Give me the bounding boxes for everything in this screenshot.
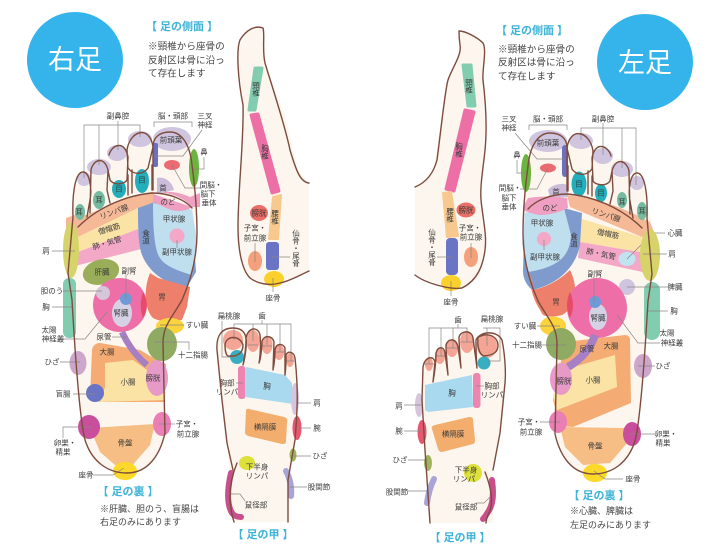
zone: 首: 首 xyxy=(159,182,167,192)
zone: 下半身リンパ: 下半身 xyxy=(455,464,478,474)
zone: 耳: 耳 xyxy=(75,208,83,216)
bone: 仙骨・尾骨 xyxy=(266,228,300,270)
zone: 甲状腺 xyxy=(153,203,197,275)
zone: 歯: 歯 xyxy=(454,314,462,324)
zone: 副鼻腔 xyxy=(77,110,152,186)
zone: 腕: 腕 xyxy=(395,426,403,436)
zone: 副甲状腺 xyxy=(162,228,192,256)
zone: 食道 xyxy=(523,208,582,290)
zone: 膀胱 xyxy=(456,202,476,218)
zone: 鼠径部: 鼠径部 xyxy=(455,502,478,512)
zone: 太陽神経叢: 神経叢 xyxy=(42,334,65,344)
zone: 僧帽筋 xyxy=(580,219,642,252)
heading: 足の裏 (right): 【 足の裏 】 xyxy=(97,484,159,498)
zone: 股関節 xyxy=(286,471,331,496)
bone: 胸椎: 胸椎 xyxy=(260,143,270,161)
bone: 腰椎: 腰椎 xyxy=(270,209,280,226)
panel: right foot top view xyxy=(216,310,331,522)
zone: 太陽神経叢: 太陽 xyxy=(42,324,57,334)
zone: 脳・頭部: 脳・頭部 xyxy=(533,114,563,124)
zone: 胸部リンパ: 胸部 xyxy=(220,378,235,388)
panel: right foot sole xyxy=(41,110,222,480)
zone: 鼻 xyxy=(513,150,531,192)
zone: 鼠径部 xyxy=(228,473,268,517)
zone: 腕: 腕 xyxy=(313,424,321,432)
bone: 仙骨・尾骨: 仙骨・尾骨 xyxy=(427,227,436,266)
zone: リンパ腺 xyxy=(66,192,158,237)
zone: 歯 xyxy=(424,314,474,371)
zone: 前頭葉 xyxy=(153,127,191,151)
zone: のど: のど xyxy=(542,204,558,212)
zone: 間脳・脳下垂体 xyxy=(499,164,556,212)
zone: 十二指腸 xyxy=(147,327,208,361)
zone: 肩: 肩 xyxy=(313,398,321,408)
bone: 腰椎 xyxy=(443,192,458,237)
bone: 頸椎 xyxy=(463,65,475,106)
zone: 胸: 胸 xyxy=(263,380,271,390)
zone: 子宮・前立腺 xyxy=(518,411,567,436)
zone: 子宮・前立腺 xyxy=(244,222,267,271)
zone: 卵巣・精巣 xyxy=(54,415,100,456)
zone: 座骨: 座骨 xyxy=(78,470,94,480)
zone: 肩: 肩 xyxy=(395,402,403,410)
zone: 副甲状腺 xyxy=(530,232,560,262)
bone: 仙骨・尾骨: 仙骨・尾骨 xyxy=(291,228,300,267)
zone: すい臓 xyxy=(156,318,209,334)
zone: 卵巣・精巣: 卵巣・ xyxy=(655,428,677,438)
zone: 目: 目 xyxy=(575,180,583,188)
zone: リンパ腺: リンパ腺 xyxy=(590,205,622,224)
zone: 耳 xyxy=(75,191,105,220)
foot base xyxy=(238,28,309,285)
zone: 前頭葉: 前頭葉 xyxy=(537,138,560,148)
zone: 股関節 xyxy=(386,479,434,503)
zone: 卵巣・精巣: 精巣 xyxy=(656,438,671,448)
zone: 食道: 食道 xyxy=(569,232,578,249)
zone: 股関節: 股関節 xyxy=(386,486,409,496)
zone: 子宮・前立腺: 前立腺 xyxy=(520,426,543,436)
zone: 食道: 食道 xyxy=(141,229,150,246)
bone: 腰椎 xyxy=(269,195,281,239)
zone: 目 xyxy=(572,172,607,202)
foot outline xyxy=(217,328,297,522)
bone: 頸椎: 頸椎 xyxy=(464,78,474,95)
zone: 副鼻腔 xyxy=(569,114,644,190)
zone: 肩 xyxy=(291,383,321,415)
zone: 副腎: 副腎 xyxy=(588,268,603,278)
foot base xyxy=(66,133,197,473)
zone: 胸部リンパ: リンパ xyxy=(216,388,239,396)
zone: 横隔膜 xyxy=(432,417,475,452)
zone: 胸 xyxy=(246,367,293,404)
zone: 座骨 xyxy=(583,464,640,484)
zone: 太陽神経叢 xyxy=(42,312,107,344)
zone: 僧帽筋 xyxy=(78,208,138,252)
zone: 脾臓 xyxy=(619,279,683,295)
zone: すい臓: すい臓 xyxy=(186,320,209,330)
bone: 頸椎 xyxy=(249,68,262,110)
zone: 座骨 xyxy=(264,271,284,302)
zone: 三叉神経: 三叉 xyxy=(502,114,517,124)
zone: 副甲状腺: 副甲状腺 xyxy=(530,252,560,262)
zone: 腎臓 xyxy=(589,304,607,330)
zone: 膀胱 xyxy=(250,205,268,221)
zone: 扁桃腺 xyxy=(218,310,244,364)
zone: 目: 目 xyxy=(115,184,123,194)
panel: left foot sole xyxy=(499,114,684,484)
zone: 間脳・脳下垂体: 脳下 xyxy=(502,192,517,202)
zone: 腎臓 xyxy=(112,299,132,327)
zone: 腕 xyxy=(292,416,321,440)
zone: 甲状腺: 甲状腺 xyxy=(531,218,554,228)
bone: 仙骨・尾骨 xyxy=(427,227,458,275)
heading: 足の甲 (left): 【 足の甲 】 xyxy=(429,531,491,544)
zone: 扁桃腺: 扁桃腺 xyxy=(218,310,241,320)
zone: 卵巣・精巣 xyxy=(623,422,677,448)
zone: 鼻 xyxy=(189,146,208,187)
zone: 股関節: 股関節 xyxy=(308,482,331,492)
zone: 首 xyxy=(548,184,568,197)
zone: ひざ xyxy=(44,351,86,375)
zone: 膀胱: 膀胱 xyxy=(146,372,161,382)
foot base xyxy=(523,134,654,474)
note: sole (right) xyxy=(100,504,199,527)
zone: 大腸: 大腸 xyxy=(100,346,115,356)
badge: 右足: 右足 xyxy=(48,45,102,75)
zone: 横隔膜 xyxy=(245,409,287,444)
zone: 座骨 xyxy=(441,275,461,306)
zone: 副鼻腔: 副鼻腔 xyxy=(592,114,615,124)
zone: 胆のう: 胆のう xyxy=(41,286,63,296)
zone: 尿管 xyxy=(96,332,147,365)
zone: 腎臓: 腎臓 xyxy=(114,308,129,318)
zone: 目 xyxy=(112,169,149,198)
foot outline xyxy=(238,27,309,284)
zone: 骨盤: 骨盤 xyxy=(118,438,133,448)
zone: 三叉神経: 神経 xyxy=(198,120,213,130)
zone: すい臓 xyxy=(514,316,566,336)
zone: 扁桃腺 xyxy=(477,314,504,370)
zone: 子宮・前立腺: 前立腺 xyxy=(460,232,483,242)
badge: 左足 xyxy=(597,14,693,110)
note: side view (left): て存在します xyxy=(498,70,556,82)
foot outline xyxy=(422,332,505,523)
foot base xyxy=(415,31,485,288)
note: sole (left): ※心臓、脾臓は xyxy=(570,505,633,516)
zone: 肺・気管 xyxy=(75,229,141,266)
zone: 胸 xyxy=(42,278,76,338)
zone: 膀胱: 膀胱 xyxy=(458,204,474,214)
zone: 鼻: 鼻 xyxy=(513,150,521,160)
zone: 間脳・脳下垂体: 間脳・ xyxy=(499,182,521,192)
zone: 腕 xyxy=(395,420,426,444)
zone: 腎 pink circle xyxy=(93,278,147,332)
zone: 小腸 xyxy=(553,355,617,410)
bone: 胸椎 xyxy=(446,110,474,191)
zone: 太陽神経叢: 太陽 xyxy=(660,328,675,338)
zone: 胸部リンパ xyxy=(473,373,504,408)
zone: 膀胱 xyxy=(550,363,572,395)
zone: のど xyxy=(523,196,568,215)
zone: 肺・気管: 肺・気管 xyxy=(585,246,617,262)
zone: 脾臓: 脾臓 xyxy=(668,282,683,292)
zone: 脳・頭部: 脳・頭部 xyxy=(158,110,188,120)
zone: 尿管: 尿管 xyxy=(580,344,595,354)
zone: 盲腸: 盲腸 xyxy=(56,388,71,398)
zone: 胆のう xyxy=(41,286,110,300)
zone: 胸 xyxy=(644,282,678,340)
zone: 大腸: 大腸 xyxy=(604,340,619,350)
zone: 胃 xyxy=(146,273,190,321)
zone: 肺・気管 xyxy=(578,242,647,273)
zone: 横隔膜: 横隔膜 xyxy=(442,428,465,438)
foot base xyxy=(422,334,505,523)
zone: 副腎 xyxy=(588,268,603,308)
zone: 心臓: 心臓 xyxy=(668,228,683,238)
zone: 卵巣・精巣: 卵巣・ xyxy=(54,438,76,448)
note: side view (right): ※頸椎から座骨の xyxy=(148,40,225,52)
zone: 肝臓 xyxy=(80,255,122,289)
zone: 胸: 胸 xyxy=(670,306,678,316)
zone: 僧帽筋: 僧帽筋 xyxy=(97,220,122,237)
zone: 下半身リンパ: リンパ xyxy=(453,474,476,484)
zone: 十二指腸 xyxy=(512,328,576,360)
note: sole (left) xyxy=(570,505,651,530)
zone: 子宮・前立腺 xyxy=(459,222,483,267)
zone: 甲状腺 xyxy=(524,208,571,272)
zone: 副甲状腺: 副甲状腺 xyxy=(162,246,192,256)
zone: 間脳・脳下垂体: 垂体 xyxy=(202,198,217,208)
heading: 足の裏 (left): 【 足の裏 】 xyxy=(568,488,630,502)
foot base xyxy=(217,328,297,522)
zone: 腎 pink circle xyxy=(567,278,627,338)
zone: 首 xyxy=(157,178,174,194)
zone: 大腸 xyxy=(90,343,166,402)
bone: 胸椎 xyxy=(251,114,279,193)
zone: 肩: 肩 xyxy=(668,250,676,258)
zone: 首: 首 xyxy=(552,186,560,196)
zone: 膀胱: 膀胱 xyxy=(252,208,267,218)
heading: 足の側面 (left): 【 足の側面 】 xyxy=(496,24,568,37)
zone: 子宮・前立腺 xyxy=(153,412,200,438)
zone: 横隔膜: 横隔膜 xyxy=(254,422,277,432)
zone: 胃: 胃 xyxy=(158,292,166,302)
zone: 胃: 胃 xyxy=(552,298,560,306)
zone: 胃 xyxy=(530,270,575,316)
bone: 腰椎: 腰椎 xyxy=(445,207,454,224)
zone: すい臓: すい臓 xyxy=(514,320,537,330)
zone: 鼠径部 xyxy=(455,480,493,519)
zone: 卵巣・精巣: 精巣 xyxy=(56,446,71,456)
zone: 胸部リンパ: リンパ xyxy=(481,390,504,400)
zone: 三叉神経: 三叉 xyxy=(198,112,213,120)
zone: 副鼻腔: 副鼻腔 xyxy=(107,110,130,120)
note: side view (right): て存在します xyxy=(148,68,206,80)
zone: 甲状腺: 甲状腺 xyxy=(163,214,186,224)
zone: 三叉神経 xyxy=(153,112,213,167)
zone: 子宮・前立腺: 前立腺 xyxy=(244,232,267,242)
zone: リンパ腺: リンパ腺 xyxy=(98,202,130,221)
foot outline xyxy=(68,132,197,473)
zone: ひざ: ひざ xyxy=(44,356,60,366)
zone: のど: のど xyxy=(160,198,176,206)
badge: 右足 xyxy=(27,12,123,108)
zone: 耳: 耳 xyxy=(638,206,646,216)
zone: ひざ: ひざ xyxy=(656,360,671,370)
zone: 膀胱 xyxy=(146,360,168,396)
note: side view (right): 反射区は骨に沿っ xyxy=(148,54,225,66)
note: side view (left): ※頸椎から座骨の xyxy=(498,44,575,56)
zone: 座骨 xyxy=(78,462,137,480)
zone: 胸 xyxy=(425,375,473,412)
zone: 心臓 xyxy=(618,228,683,266)
zone: 前頭葉 xyxy=(529,130,567,152)
heading: 足の甲 (right): 【 足の甲 】 xyxy=(232,528,294,541)
zone: 腎臓: 腎臓 xyxy=(590,312,606,322)
zone: 肩 xyxy=(395,393,423,417)
zone: ひざ xyxy=(392,454,432,471)
zone: 歯 xyxy=(223,310,294,367)
heading: 足の側面 (right): 【 足の側面 】 xyxy=(146,20,218,33)
zone: 子宮・前立腺: 子宮・ xyxy=(459,222,481,232)
zone: 子宮・前立腺: 子宮・ xyxy=(244,222,266,232)
zone: 三叉神経: 神経 xyxy=(502,122,517,132)
zone: 子宮・前立腺: 子宮・ xyxy=(518,416,540,426)
zone: 脳・頭部 xyxy=(154,110,192,127)
zone: ひざ: ひざ xyxy=(312,450,328,460)
zone: 目: 目 xyxy=(597,188,605,198)
zone: 前頭葉: 前頭葉 xyxy=(160,134,183,144)
zone: 太陽神経叢: 神経叢 xyxy=(661,338,684,348)
panel: left foot side view xyxy=(415,31,486,306)
zone: 子宮・前立腺: 子宮・ xyxy=(176,418,198,428)
zone: 歯: 歯 xyxy=(258,310,266,320)
zone: 胸部リンパ: 胸部 xyxy=(484,380,500,390)
zone: 肝臓: 肝臓 xyxy=(94,266,110,276)
foot outline xyxy=(523,133,652,474)
zone: 大腸 xyxy=(553,335,631,427)
zone: 胸: 胸 xyxy=(42,302,50,312)
zone: 間脳・脳下垂体: 垂体 xyxy=(502,202,517,212)
panel: right foot side view xyxy=(238,27,309,303)
zone: 下半身リンパ xyxy=(453,464,482,484)
zone: 座骨: 座骨 xyxy=(626,474,640,484)
zone: 子宮・前立腺: 前立腺 xyxy=(177,428,200,438)
zone: 十二指腸: 十二指腸 xyxy=(512,340,542,350)
note: sole (left): 左足のみにあります xyxy=(570,519,651,530)
zone: 下半身リンパ: 下半身 xyxy=(246,462,269,472)
foot outline xyxy=(415,31,486,288)
zone: リンパ腺 xyxy=(567,195,655,237)
note: side view (right) xyxy=(148,40,225,80)
zone: 座骨: 座骨 xyxy=(444,298,458,306)
panel: left foot top view xyxy=(386,314,505,523)
zone: 三叉神経 xyxy=(502,114,568,177)
zone: 耳: 耳 xyxy=(618,198,626,206)
zone: 肩 xyxy=(42,222,79,278)
badge: 左足: 左足 xyxy=(618,48,672,78)
note: sole (right): ※肝臓、胆のう、盲腸は xyxy=(100,504,199,514)
note: side view (left): 反射区は骨に沿っ xyxy=(498,56,575,68)
zone: 副腎 xyxy=(120,266,137,305)
zone: 胸部リンパ xyxy=(216,366,246,399)
zone: 間脳・脳下垂体 xyxy=(164,160,222,208)
zone: のど xyxy=(153,192,200,211)
zone: 耳 xyxy=(617,192,647,220)
zone: ひざ xyxy=(290,448,328,462)
zone: 小腸: 小腸 xyxy=(586,376,601,384)
zone: 鼻: 鼻 xyxy=(200,146,208,156)
zone: 盲腸 xyxy=(56,384,104,402)
zone: 間脳・脳下垂体: 間脳・ xyxy=(200,180,222,190)
zone: 下半身リンパ: リンパ xyxy=(246,472,269,480)
zone: 胸: 胸 xyxy=(448,388,456,398)
zone: 肺・気管: 肺・気管 xyxy=(91,233,123,252)
zone: 骨盤 xyxy=(560,427,627,465)
zone: 太陽神経叢 xyxy=(617,315,684,348)
zone: 肩 xyxy=(640,229,676,281)
zone: 十二指腸: 十二指腸 xyxy=(178,350,208,360)
note: sole (right): 右足のみにあります xyxy=(100,516,181,527)
zone: 尿管 xyxy=(568,335,595,367)
zone: 目: 目 xyxy=(138,176,146,184)
zone: 小腸: 小腸 xyxy=(120,378,136,386)
zone: 僧帽筋: 僧帽筋 xyxy=(596,226,621,241)
zone: 間脳・脳下垂体: 脳下 xyxy=(200,188,216,198)
zone: 食道 xyxy=(138,202,196,287)
zone: 尿管: 尿管 xyxy=(96,332,112,342)
zone: ひざ: ひざ xyxy=(392,454,408,464)
zone: 肩: 肩 xyxy=(42,246,50,256)
zone: ひざ xyxy=(634,354,671,378)
zone: 骨盤: 骨盤 xyxy=(588,440,603,450)
zone: 耳: 耳 xyxy=(95,196,103,204)
note: side view (left) xyxy=(498,44,575,82)
bone: 頸椎: 頸椎 xyxy=(251,81,260,98)
zone: 膀胱: 膀胱 xyxy=(556,376,572,386)
zone: 下半身リンパ xyxy=(239,456,269,480)
zone: 小腸 xyxy=(100,360,165,402)
zone: 副腎: 副腎 xyxy=(122,266,137,276)
zone: 鼠径部: 鼠径部 xyxy=(245,500,268,510)
bone: 胸椎: 胸椎 xyxy=(454,141,464,159)
zone: 脳・頭部 xyxy=(529,114,567,130)
zone: 骨盤 xyxy=(90,424,155,468)
zone: 座骨: 座骨 xyxy=(266,294,280,302)
zone: 扁桃腺: 扁桃腺 xyxy=(481,314,504,324)
